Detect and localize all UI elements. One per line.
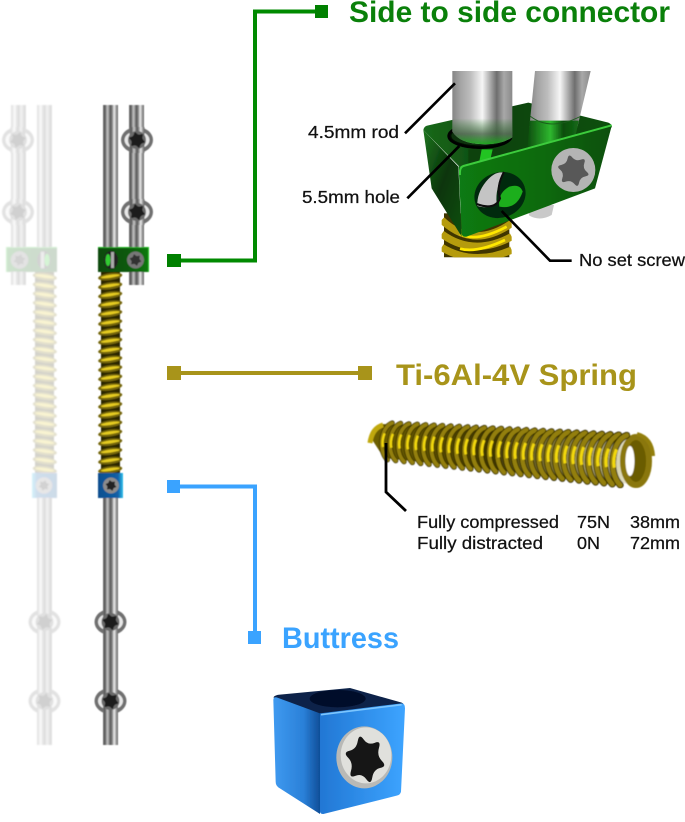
spring specification table: 0N [577, 533, 600, 553]
cube left face [273, 697, 320, 814]
spring specification table: 72mm [630, 533, 680, 553]
second rod [527, 71, 591, 150]
rod reflection below ring [468, 149, 503, 165]
cube top hole [310, 690, 366, 707]
heading: Ti-6Al-4V spring: Ti-6Al-4V Spring [396, 359, 637, 392]
cube front face [320, 703, 405, 814]
spring arrow: gold leader line [167, 366, 372, 380]
buttress arrow: blue leader line [167, 480, 261, 644]
bright edge highlight [460, 125, 612, 175]
spring specification table: Fully distracted [417, 533, 543, 553]
label: no set screw: No set screw [579, 250, 685, 270]
screw tip under block [527, 205, 554, 219]
buttress cube render [273, 688, 405, 814]
spring specification table: Fully compressed [417, 512, 559, 532]
5.5mm hole ring [449, 124, 511, 148]
spring pointer line [386, 443, 406, 511]
connector block top face [423, 103, 612, 167]
connector close-up render [405, 71, 612, 261]
large spring render [370, 423, 653, 485]
side hole without set screw [468, 165, 532, 225]
label: 4.5mm rod: 4.5mm rod [308, 122, 399, 142]
cube top face [273, 688, 404, 714]
heading: buttress: Buttress [282, 622, 399, 655]
spring specification table [417, 512, 680, 553]
cube edge highlight [321, 705, 402, 715]
first rod [452, 71, 512, 144]
implant assembly: rods, clamps, connector, spring and buttress [94, 105, 153, 745]
connector block front face [459, 126, 612, 237]
label: 5.5mm hole: 5.5mm hole [302, 187, 400, 207]
connector block left face [423, 130, 462, 237]
ghost assembly: faded mirrored position [2, 105, 60, 745]
pointer lines [405, 83, 572, 261]
spring below connector [442, 213, 512, 258]
connector arrow: green leader line [167, 5, 328, 267]
connector locking screw [551, 148, 595, 192]
spring specification table: 38mm [630, 512, 680, 532]
buttress set screw [336, 726, 392, 788]
spring specification table: 75N [577, 512, 610, 532]
